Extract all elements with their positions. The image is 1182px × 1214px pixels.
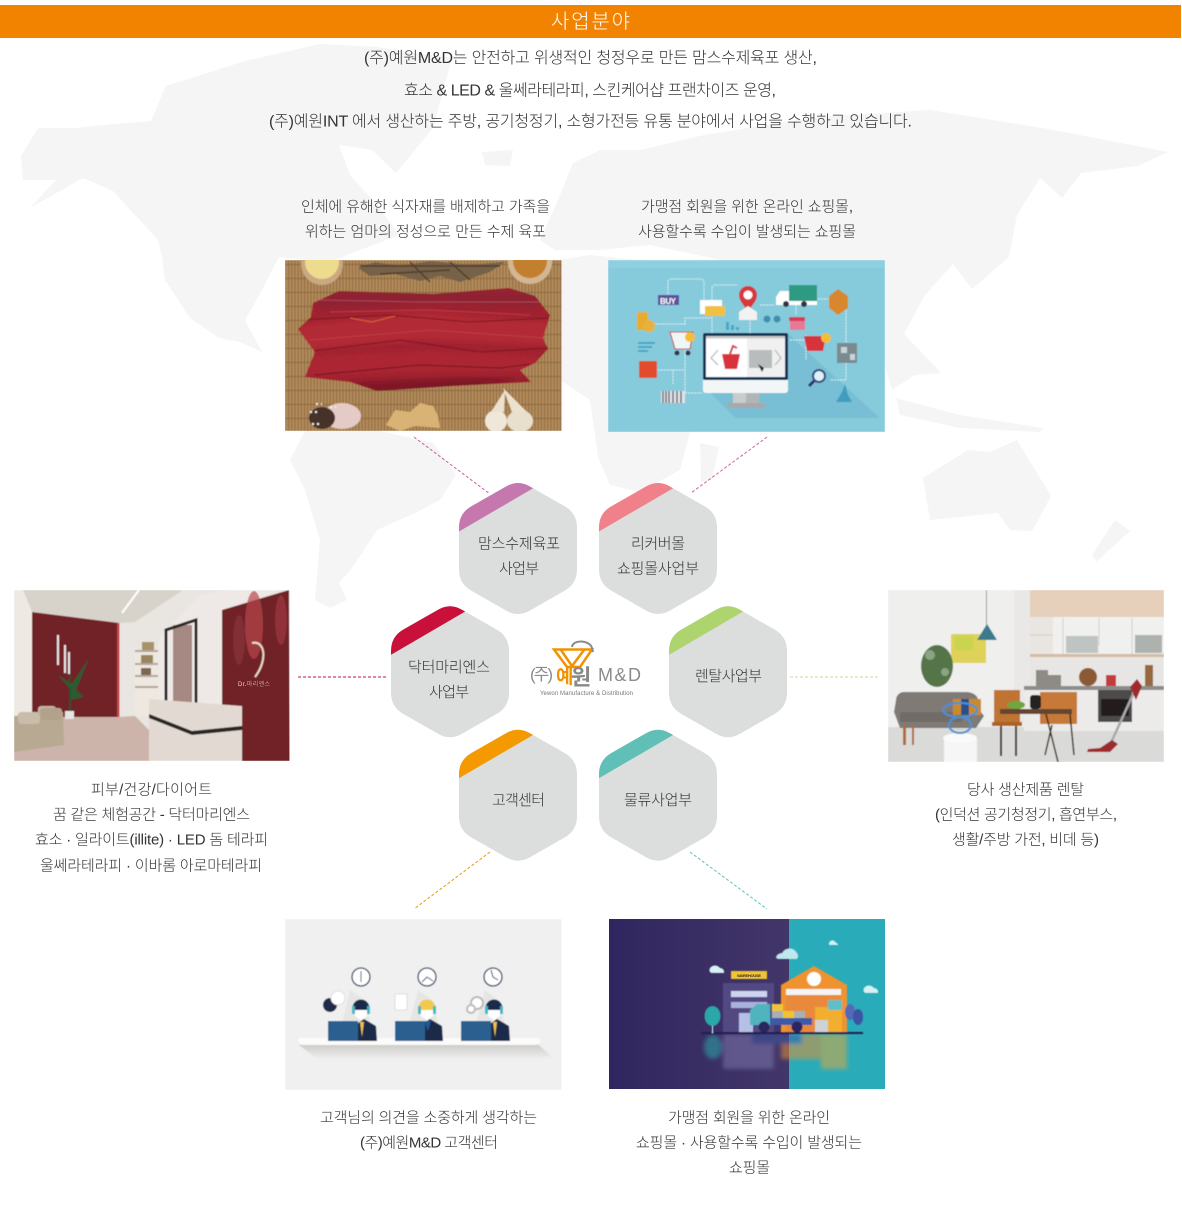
caption: Dr. Marience: 피부/건강/다이어트 [91,782,212,798]
photo: Dr. Marience interior: Dr.마리엔스 [238,681,270,688]
hexagon: logistics division: 물류사업부 [624,792,692,809]
hexagon: jerky division [459,483,577,614]
caption: online mall: 사용할수록 수입이 발생되는 쇼핑몰 [638,224,856,240]
hexagon: doctor marience division [391,606,509,737]
caption: customer center [320,1110,537,1152]
caption: logistics: 쇼핑몰 · 사용할수록 수입이 발생되는 [636,1134,862,1152]
hexagon: customer center [459,730,577,861]
illustration: online shopping mall [608,260,885,432]
connector: jerky [414,437,490,494]
caption: rental: 생활/주방 가전, 비데 등) [952,832,1099,848]
connector: rental [790,676,880,678]
hexagon: jerky division: 사업부 [499,560,539,578]
caption: jerky: 위하는 엄마의 정성으로 만든 수제 육포 [305,224,546,240]
caption: rental: 당사 생산제품 렌탈 [967,782,1084,798]
connector: logistics [690,852,767,909]
hexagon: rental division [669,606,787,737]
caption: Dr. Marience [35,782,268,874]
illustration: logistics warehouse: WAREHOUSE [737,973,761,978]
intro text: 효소 & LED & 울쎄라테라피, 스킨케어샵 프랜차이즈 운영, [404,82,776,100]
caption: logistics: 가맹점 회원을 위한 온라인 [668,1110,830,1126]
illustration: logistics warehouse [609,919,885,1089]
title: 사업분야 [551,10,630,33]
caption: rental [935,782,1117,848]
caption: logistics: 쇼핑몰 [729,1160,770,1176]
caption: Dr. Marience: 울쎄라테라피 · 이바롬 아로마테라피 [40,858,262,874]
logo: Yewon M&D: (주) [530,665,553,684]
logo: Yewon M&D [530,641,641,697]
logo icon: cart [554,641,593,667]
illustration: customer service agents [285,919,562,1090]
reflection [704,1034,847,1069]
logo: Yewon M&D: Yewon Manufacture & Distribution [540,691,633,697]
photo: Dr. Marience interior [14,590,290,761]
caption: customer center: (주)예원M&D 고객센터 [360,1134,498,1152]
hexagon: doctor marience division: 닥터마리엔스 [408,659,490,676]
hexagon: customer center: 고객센터 [492,792,545,809]
hexagon: logistics division [599,730,717,861]
title bar [0,5,1181,38]
intro text [269,49,912,130]
intro text: (주)예원INT 에서 생산하는 주방, 공기청정기, 소형가전등 유통 분야에서 사업을 수행하고 있습니다. [269,112,912,130]
world map background [21,44,1168,608]
hexagon: rental division: 렌탈사업부 [695,668,762,685]
connector: doctor marience [298,676,387,678]
wall clocks [352,968,502,986]
caption: online mall [638,198,856,240]
caption: rental: (인덕션 공기청정기, 흡연부스, [935,806,1117,824]
logo: Yewon M&D: 원 [571,665,591,690]
caption: jerky: 인체에 유해한 식자재를 배제하고 가족을 [301,198,550,216]
caption: customer center: 고객님의 의견을 소중하게 생각하는 [320,1110,537,1126]
hexagon: jerky division: 맘스수제육포 [478,536,560,552]
illustration: online shopping mall: BUY [660,297,677,306]
caption: Dr. Marience: 꿈 같은 체험공간 - 닥터마리엔스 [53,806,250,824]
caption: jerky [301,198,550,240]
connector: customer center [414,852,490,909]
intro text: (주)예원M&D는 안전하고 위생적인 청정우로 만든 맘스수제육포 생산, [364,49,817,67]
logo: Yewon M&D: M&D [598,665,641,685]
hexagon: doctor marience division: 사업부 [429,684,469,701]
hexagon: liquor mall division: 리커버몰 [631,536,685,552]
photo: handmade beef jerky [285,260,562,431]
logo: Yewon M&D: 예 [556,666,573,688]
caption: online mall: 가맹점 회원을 위한 온라인 쇼핑몰, [641,198,853,216]
caption: logistics [636,1110,862,1176]
hexagon: liquor mall division [599,483,717,614]
hexagon: liquor mall division: 쇼핑몰사업부 [617,560,699,578]
caption: Dr. Marience: 효소 · 일라이트(illite) · LED 돔 테라피 [35,832,268,848]
connector: online mall [691,437,767,493]
photo: rental home appliances [888,590,1164,762]
